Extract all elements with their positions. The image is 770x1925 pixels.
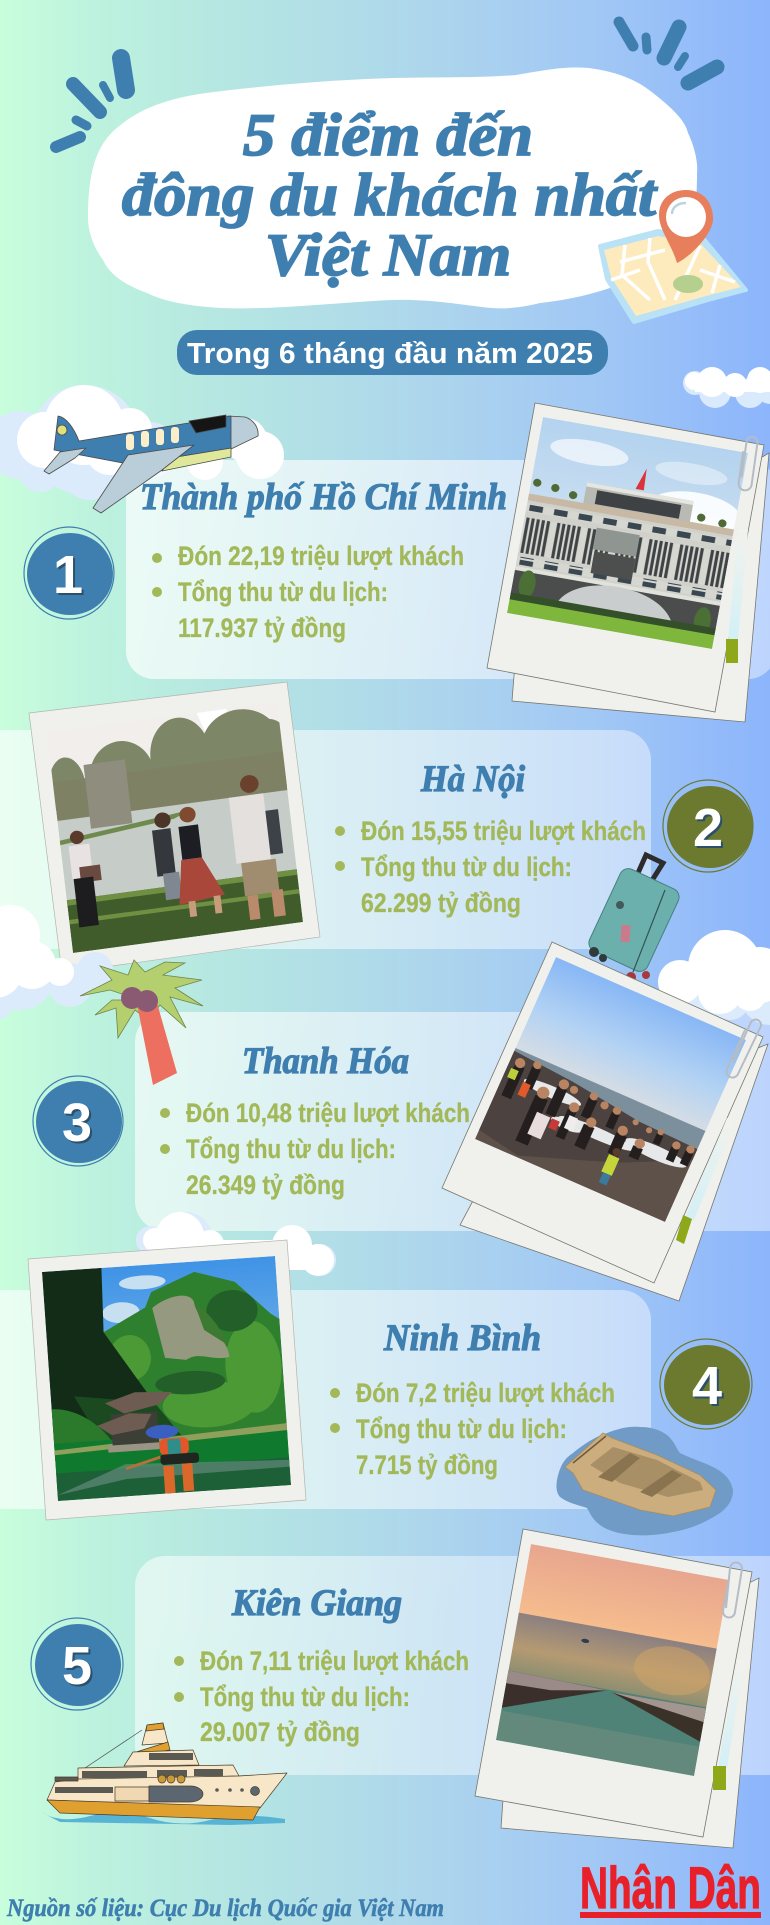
text block: Ho Chi Minh City stats: Đón 22,19 triệu lượt khách xyxy=(178,541,464,571)
cloud behind plane xyxy=(0,385,284,500)
text block: Ho Chi Minh City stats: Tổng thu từ du lịch: xyxy=(178,577,388,607)
text block: Kien Giang stats: Đón 7,11 triệu lượt khách xyxy=(200,1646,469,1676)
decorative sparks top left xyxy=(56,58,126,147)
badge 4: 4 xyxy=(692,1356,722,1416)
polaroid 3: Thanh Hoa xyxy=(442,942,768,1301)
subtitle pill: Trong 6 tháng đầu năm 2025 xyxy=(187,338,593,370)
icon: airplane xyxy=(44,415,258,513)
icon: map with pin xyxy=(600,190,746,322)
badge 2: 2 xyxy=(693,798,723,858)
text block: Hanoi stats: Đón 15,55 triệu lượt khách xyxy=(361,816,646,846)
panel 3 background xyxy=(135,1012,770,1231)
panel 4 background xyxy=(0,1290,651,1509)
polaroid 5: Kien Giang xyxy=(475,1529,759,1848)
text block: Thanh Hoa stats: 26.349 tỷ đồng xyxy=(186,1170,345,1200)
panel 2 background xyxy=(0,730,651,949)
title xyxy=(122,102,658,288)
polaroid 1: Ho Chi Minh City xyxy=(487,403,769,722)
heading: Hanoi: Hà Nội xyxy=(420,759,526,800)
badge 3 xyxy=(33,1076,123,1166)
photo: Trang An xyxy=(42,1256,291,1501)
polaroid 4: Ninh Binh xyxy=(28,1240,306,1520)
source note: Nguồn số liệu: Cục Du lịch Quốc gia Việt Nam xyxy=(6,1895,444,1922)
badge 3: 3 xyxy=(62,1093,92,1153)
title blob xyxy=(88,67,697,308)
icon: boat on water xyxy=(556,1427,733,1535)
text block: Ninh Binh stats: 7.715 tỷ đồng xyxy=(356,1450,498,1480)
badge 5: 5 xyxy=(62,1636,92,1696)
text block: Thanh Hoa stats: Tổng thu từ du lịch: xyxy=(186,1134,396,1164)
text block: Thanh Hoa stats: Đón 10,48 triệu lượt khách xyxy=(186,1098,470,1128)
cloud left, between Hanoi and Thanh Hoa xyxy=(0,905,113,1020)
text block: Ninh Binh stats: Tổng thu từ du lịch: xyxy=(356,1414,567,1444)
panel 5 background xyxy=(135,1556,770,1775)
paperclip xyxy=(726,1020,761,1078)
subtitle pill xyxy=(177,330,608,375)
badge 2 xyxy=(663,780,753,872)
text block: Kien Giang stats: 29.007 tỷ đồng xyxy=(200,1717,360,1747)
decorative sparks top right xyxy=(619,22,717,83)
heading: Thanh Hoa: Thanh Hóa xyxy=(242,1041,409,1082)
text block: Ho Chi Minh City stats xyxy=(152,541,464,643)
panel 1 background xyxy=(126,460,770,679)
badge 5 xyxy=(31,1618,123,1710)
text block: Kien Giang stats xyxy=(174,1646,469,1747)
icon: suitcase xyxy=(586,855,682,982)
title: đông du khách nhất xyxy=(122,162,658,228)
text block: Ninh Binh stats: Đón 7,2 triệu lượt khách xyxy=(356,1378,615,1408)
text block: Thanh Hoa stats xyxy=(160,1098,470,1200)
text block: Hanoi stats: Tổng thu từ du lịch: xyxy=(361,852,572,882)
text block: Ho Chi Minh City stats: 117.937 tỷ đồng xyxy=(178,613,346,643)
cloud behind Ninh Binh polaroid xyxy=(136,1212,336,1276)
heading: Kien Giang: Kiên Giang xyxy=(231,1583,402,1624)
cloud right, between Hanoi and Thanh Hoa xyxy=(658,930,770,1025)
photo: palace xyxy=(507,417,753,650)
cloud top right xyxy=(683,367,770,408)
photo: Sam Son beach xyxy=(475,957,746,1222)
icon: palm tree xyxy=(80,960,203,1085)
text block: Ninh Binh stats xyxy=(330,1378,615,1480)
badge 1 xyxy=(24,527,114,619)
icon: cruise ship xyxy=(41,1723,287,1825)
title: Việt Nam xyxy=(265,222,511,288)
text block: Kien Giang stats: Tổng thu từ du lịch: xyxy=(200,1682,410,1712)
badge 4 xyxy=(660,1339,752,1429)
heading: Ninh Binh: Ninh Bình xyxy=(383,1318,541,1359)
polaroid 2: Hanoi xyxy=(29,682,320,973)
photo: sunset sea xyxy=(496,1544,729,1776)
paperclip xyxy=(738,436,758,491)
text block: Hanoi stats: 62.299 tỷ đồng xyxy=(361,888,521,918)
badge 1: 1 xyxy=(53,545,83,605)
photo: Hoan Kiem lake xyxy=(51,709,303,953)
heading: Ho Chi Minh City: Thành phố Hồ Chí Minh xyxy=(140,477,507,518)
text block: Hanoi stats xyxy=(335,816,646,918)
paperclip xyxy=(723,1562,742,1618)
title: 5 điểm đến xyxy=(243,102,533,168)
